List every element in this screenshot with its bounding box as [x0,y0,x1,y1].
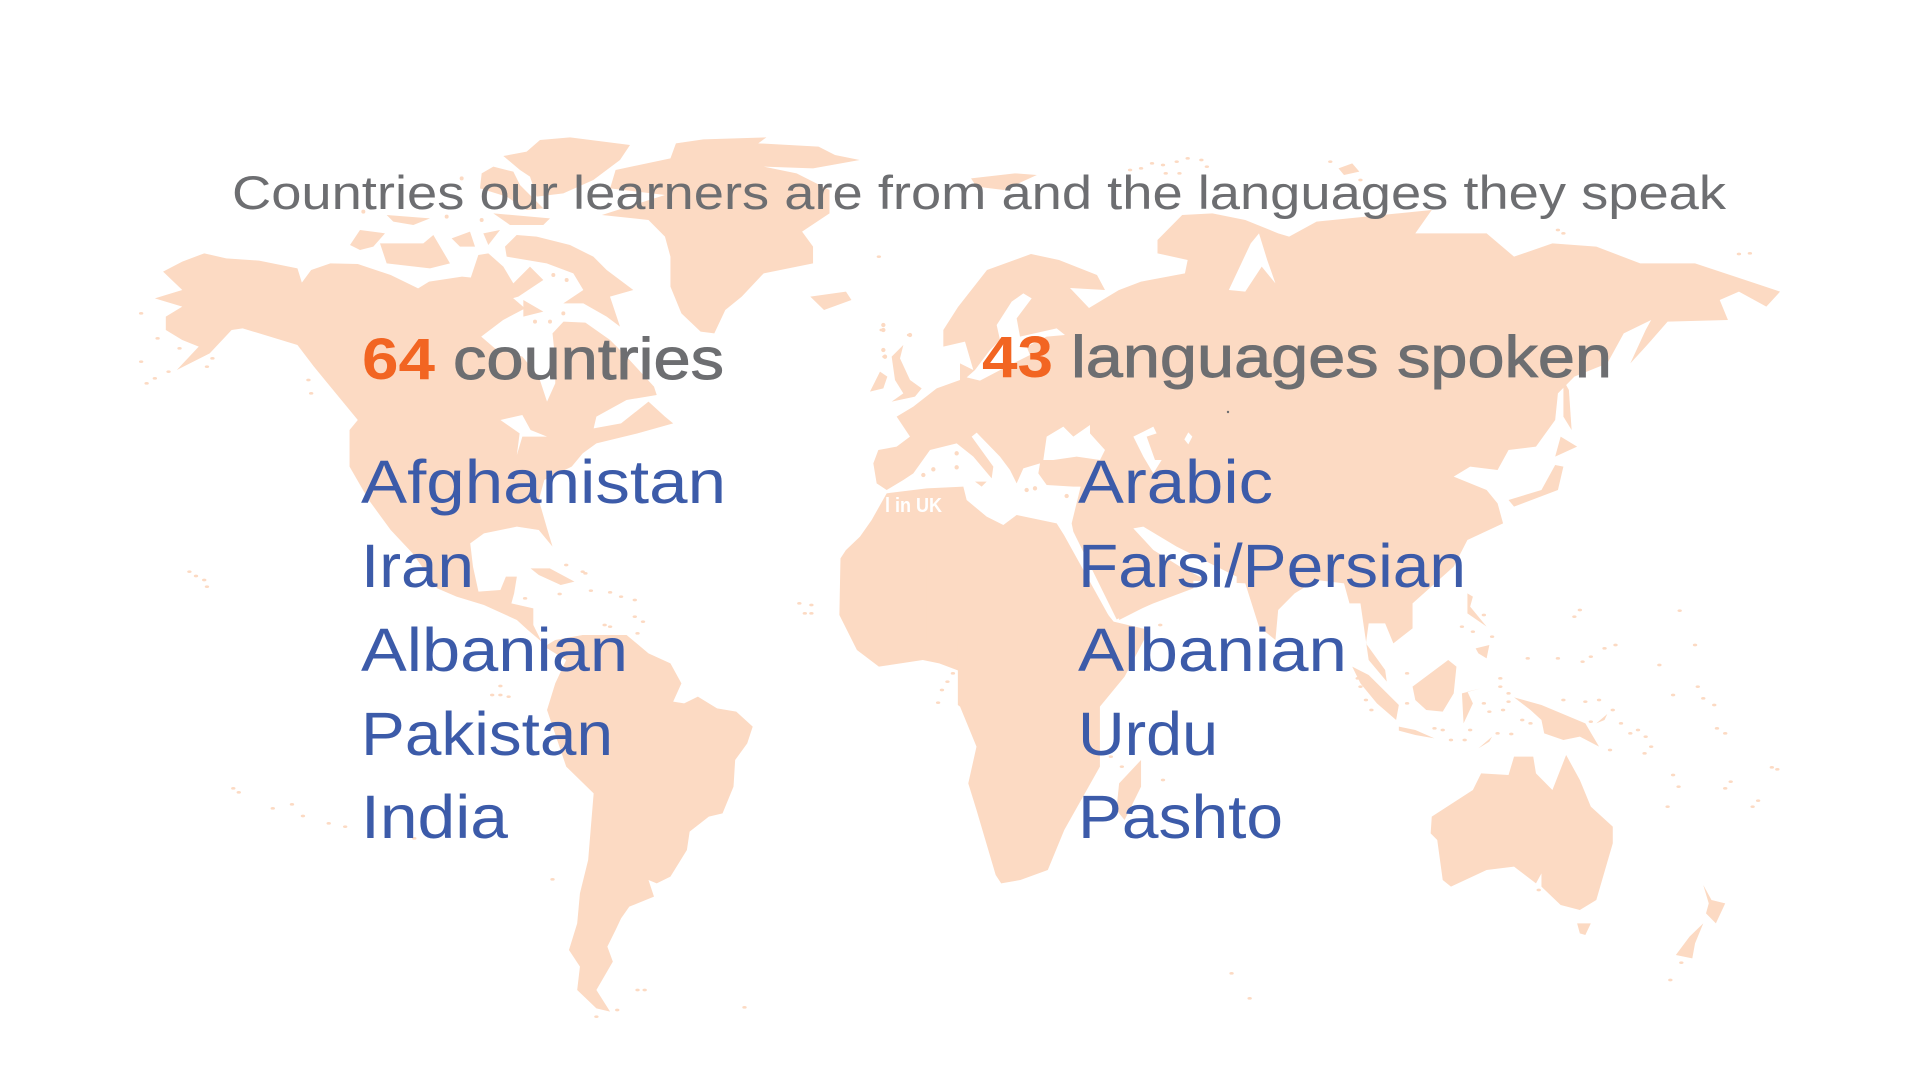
list: languages: Urdu [1078,700,1218,768]
madagascar and asia pacific islands [1116,593,1725,958]
cuba [531,568,574,585]
north africa [846,487,1108,640]
siberian inlet [1229,233,1275,292]
title: Countries our learners are from and the languages they speak [232,166,1727,219]
small islands east [1111,158,1777,998]
north america [155,253,673,642]
europe and middle east [846,254,1237,640]
great lakes [500,415,547,455]
canadian arctic islands [350,137,633,327]
arctic and japanese islands [971,163,1577,507]
world map background [141,137,1780,1017]
list: languages: Farsi/Persian [1078,532,1466,600]
list: languages: Albanian [1078,616,1347,684]
list: languages: Pashto [1078,783,1283,851]
list: languages [1078,448,1466,851]
list: countries: India [361,783,508,851]
australia [1431,755,1613,910]
label: countries: countries [453,327,724,392]
list: countries [361,448,726,851]
south america [544,635,753,1012]
list: countries: Albanian [361,616,628,684]
number: 64: 64 [362,327,435,392]
heading: 64 countries [362,327,724,392]
list: languages: Arabic [1078,448,1273,516]
inland seas [967,293,1237,600]
greenland [602,137,860,333]
africa east [958,567,1149,883]
list: countries: Iran [361,532,474,600]
list: countries: Pakistan [361,700,613,768]
label: languages spoken: languages spoken [1071,325,1612,390]
heading: 43 languages spoken [982,325,1612,390]
faint caption on map: l in UK [885,495,942,517]
africa west [839,550,961,672]
new zealand [1703,885,1725,923]
list: countries: Afghanistan [361,448,726,516]
small islands west [141,257,953,1017]
asia [1119,210,1780,682]
number: 43: 43 [982,325,1053,390]
britain and ireland [870,372,887,392]
iceland [810,292,851,310]
small dot [1227,411,1229,413]
